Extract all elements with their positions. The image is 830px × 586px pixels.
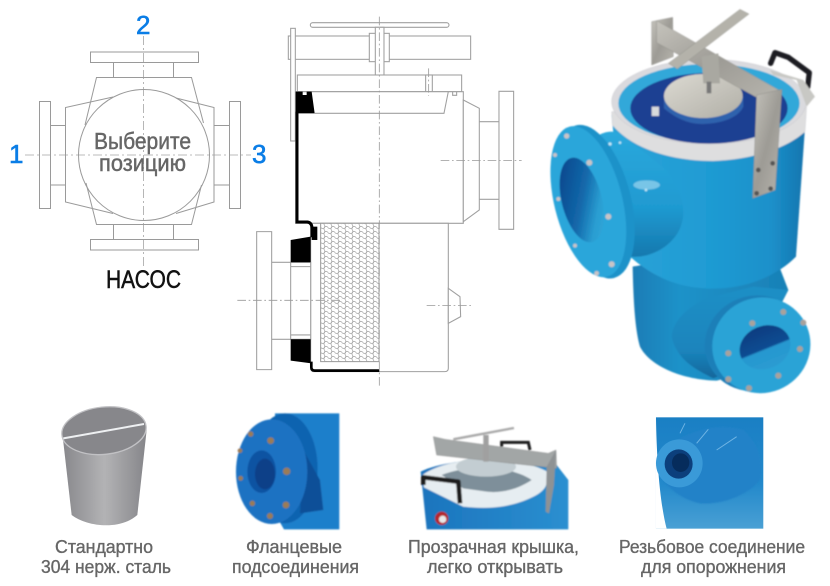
cover photo [421,428,568,529]
lower cylinder [633,253,788,381]
basket mesh [321,223,379,362]
bore [733,318,797,377]
caption: Резьбовое соединение [619,537,805,557]
prompt text [94,128,191,176]
caption [619,537,805,577]
centre hub [702,53,720,83]
handle base [770,70,815,107]
panel: threaded drain [619,417,805,577]
clamp bolts [754,161,775,196]
prompt text: Выберите [94,128,191,154]
flange rim [690,280,820,406]
lower nozzle [672,287,788,378]
centre lines [25,36,251,266]
housing circle [78,90,210,220]
rim [612,59,806,144]
panel: stainless basket [41,403,171,577]
prompt text: позицию [99,150,186,176]
outlet flange [463,91,514,229]
flange face [537,118,640,285]
position number 3: 3 [252,139,266,169]
caption: Прозрачная крышка, [408,537,579,557]
clear cover interior [630,73,788,144]
flange: bottom [90,224,198,250]
panel: flanged connections [232,413,359,577]
caption: подсоединения [232,557,359,577]
right clamp plate [753,89,782,198]
lifting bars [288,23,471,141]
caption: 304 нерж. сталь [41,557,171,577]
inner ring [618,64,800,143]
upper body [296,92,463,223]
pump label: НАСОС [106,266,181,294]
nozzle highlights [605,141,660,191]
caption: Стандартно [55,537,153,557]
flange: top [90,52,198,77]
left flange [537,117,649,287]
basket disc [664,74,743,124]
lifting beam rear plate [652,17,673,65]
lid inner line [315,92,457,113]
photo: blue strainer housing [537,9,825,408]
drain photo [656,417,763,529]
caption [232,537,359,577]
flange: right [214,102,240,208]
white band [612,107,807,161]
caption: легко открывать [427,557,563,577]
caption: для опорожнения [641,557,786,577]
caption: Фланцевые [246,537,342,557]
nut [652,107,659,116]
position number 1: 1 [9,139,23,169]
T handle [668,9,749,69]
flange rim [541,117,649,287]
black handle [771,53,809,87]
centre lines [237,17,522,388]
panel: transparent cover [408,428,579,577]
flange: left [40,102,66,208]
bottom flange [690,280,825,408]
inlet flange [257,232,311,370]
lower body [311,223,448,372]
housing outline [66,78,214,224]
flange photo [236,413,339,529]
basket photo [59,403,149,525]
panel: position selector diagram [9,10,266,294]
caption [408,537,579,577]
left nozzle [597,132,683,257]
section walls [291,92,379,371]
lifting beam [657,21,782,98]
drain boss [448,288,461,323]
flange face [698,283,825,408]
bolt holes [553,133,615,276]
position number 2: 2 [136,10,150,40]
panel: cross-section drawing [237,17,522,388]
bore [552,153,612,247]
caption [41,537,171,577]
bolt holes [725,309,806,391]
upper cylinder [612,113,806,289]
